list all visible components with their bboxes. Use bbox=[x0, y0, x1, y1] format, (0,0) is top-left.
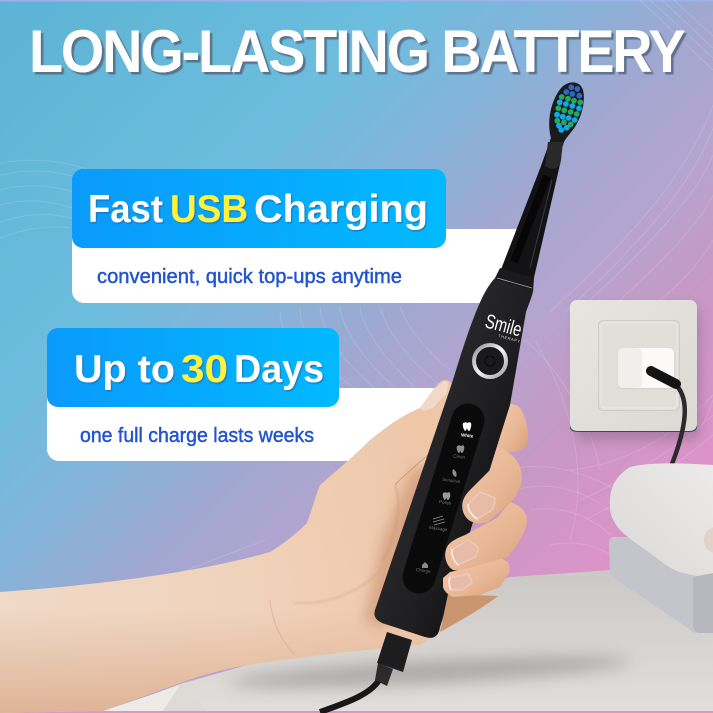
card header bbox=[47, 328, 339, 407]
brush head bbox=[545, 82, 584, 169]
little finger bbox=[443, 556, 510, 597]
heel of palm bbox=[440, 594, 498, 632]
title: LONG-LASTING BATTERY bbox=[29, 19, 686, 85]
logo: smile therapy: THERAPY bbox=[498, 333, 521, 344]
heading: up to 30 days bbox=[74, 348, 324, 391]
mode display bbox=[416, 420, 474, 577]
folded grey towel bbox=[609, 537, 713, 633]
ring finger bbox=[445, 502, 527, 570]
card body bbox=[72, 229, 520, 303]
heading: fast usb charging: Fast bbox=[88, 188, 163, 231]
index fingertip behind handle bbox=[497, 404, 528, 452]
mode: white bbox=[461, 422, 474, 439]
heading: fast usb charging: Charging bbox=[254, 188, 428, 231]
mode: massage: Massage bbox=[429, 525, 448, 532]
usb charger bbox=[618, 348, 674, 389]
table surface bbox=[0, 570, 713, 713]
card header bbox=[72, 169, 446, 248]
panel: fast usb charging bbox=[72, 169, 520, 303]
power button bbox=[474, 345, 506, 377]
mode: polish bbox=[439, 492, 452, 506]
hand shading bbox=[0, 451, 470, 713]
fingers gripping handle bbox=[440, 447, 527, 632]
collar bbox=[494, 268, 534, 292]
mode: sensitive bbox=[442, 469, 461, 484]
mode: clean bbox=[453, 445, 466, 460]
usb cable plug bbox=[320, 632, 412, 712]
rolled white towel bbox=[610, 463, 713, 576]
mode: sensitive: Sensitive bbox=[442, 477, 461, 484]
heading: fast usb charging bbox=[88, 188, 428, 231]
bristles bbox=[554, 84, 583, 133]
thumbnail bbox=[420, 381, 448, 411]
mode: massage bbox=[429, 516, 448, 532]
description: charging: convenient, quick top-ups anytime bbox=[97, 266, 402, 288]
mode: charge: Charge bbox=[416, 567, 431, 574]
panel: up to 30 days bbox=[47, 328, 470, 461]
heading: up to 30 days: Up to bbox=[74, 348, 175, 391]
arm, palm and thumb bbox=[0, 380, 470, 713]
electric toothbrush bbox=[374, 82, 584, 638]
mode: white: White bbox=[461, 432, 474, 439]
logo: smile therapy: Smile bbox=[483, 311, 524, 341]
charging cable bbox=[651, 371, 685, 464]
handle bbox=[374, 279, 533, 638]
mode: clean: Clean bbox=[453, 453, 466, 460]
towels bbox=[609, 463, 713, 633]
heading: fast usb charging: USB bbox=[170, 188, 248, 231]
hand holding toothbrush bbox=[0, 380, 528, 713]
wall outlet with charger bbox=[570, 300, 700, 464]
middle finger bbox=[462, 447, 522, 523]
mode: polish: Polish bbox=[439, 499, 452, 506]
card body bbox=[47, 388, 470, 461]
brush neck bbox=[500, 138, 563, 282]
wall plate bbox=[570, 300, 697, 431]
heading: up to 30 days: Days bbox=[234, 348, 324, 391]
mode: charge bbox=[416, 562, 431, 574]
heading: up to 30 days: 30 bbox=[181, 348, 228, 391]
description: battery life: one full charge lasts weeks bbox=[80, 425, 314, 447]
